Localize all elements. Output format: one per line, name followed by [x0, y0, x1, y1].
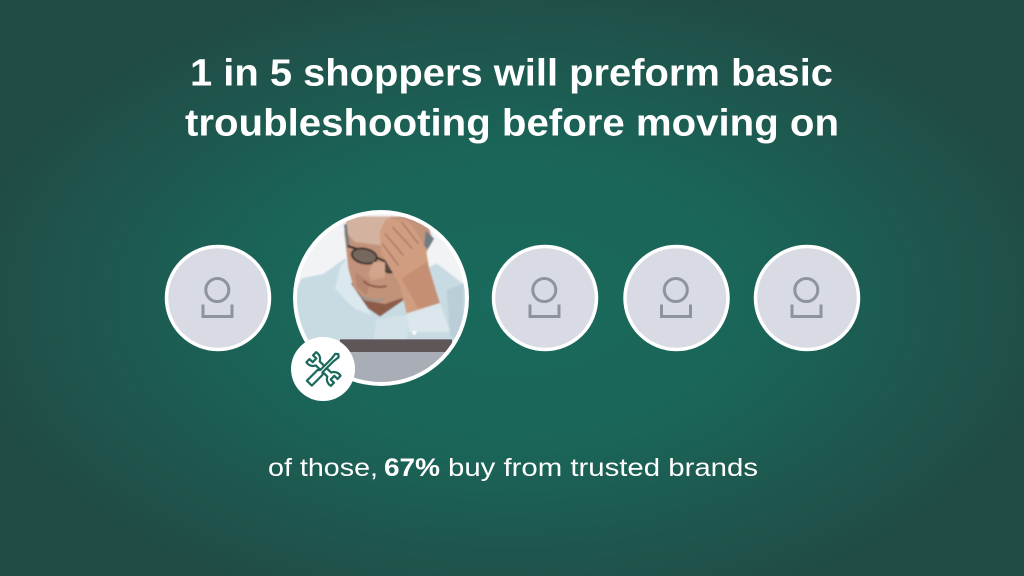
cuff — [407, 303, 450, 332]
collar — [335, 257, 372, 315]
icon: person placeholder 3 — [494, 246, 596, 350]
photo: frustrated man at laptop — [290, 210, 470, 390]
caption: 67% — [384, 454, 440, 482]
title: 1 in 5 shoppers will preform basic — [190, 52, 833, 94]
icon: person placeholder 5 — [756, 246, 858, 350]
caption: of those, — [268, 454, 378, 482]
badge: tools icon — [291, 337, 355, 401]
icon: wrench and screwdriver — [306, 352, 341, 386]
title: troubleshooting before moving on — [185, 102, 839, 144]
icon: person placeholder 4 — [625, 246, 728, 350]
head — [344, 217, 432, 304]
hand — [380, 219, 440, 314]
neck — [351, 279, 403, 317]
icon: person placeholder 1 — [166, 246, 270, 350]
button — [412, 330, 417, 335]
shirt — [293, 258, 467, 343]
beard — [361, 296, 383, 300]
glasses — [346, 244, 386, 263]
hair — [344, 224, 350, 247]
nose — [368, 262, 385, 280]
caption — [268, 454, 758, 482]
title — [185, 52, 839, 144]
laptop — [340, 339, 452, 352]
caption: buy from trusted brands — [448, 454, 758, 482]
mouth — [363, 281, 387, 287]
